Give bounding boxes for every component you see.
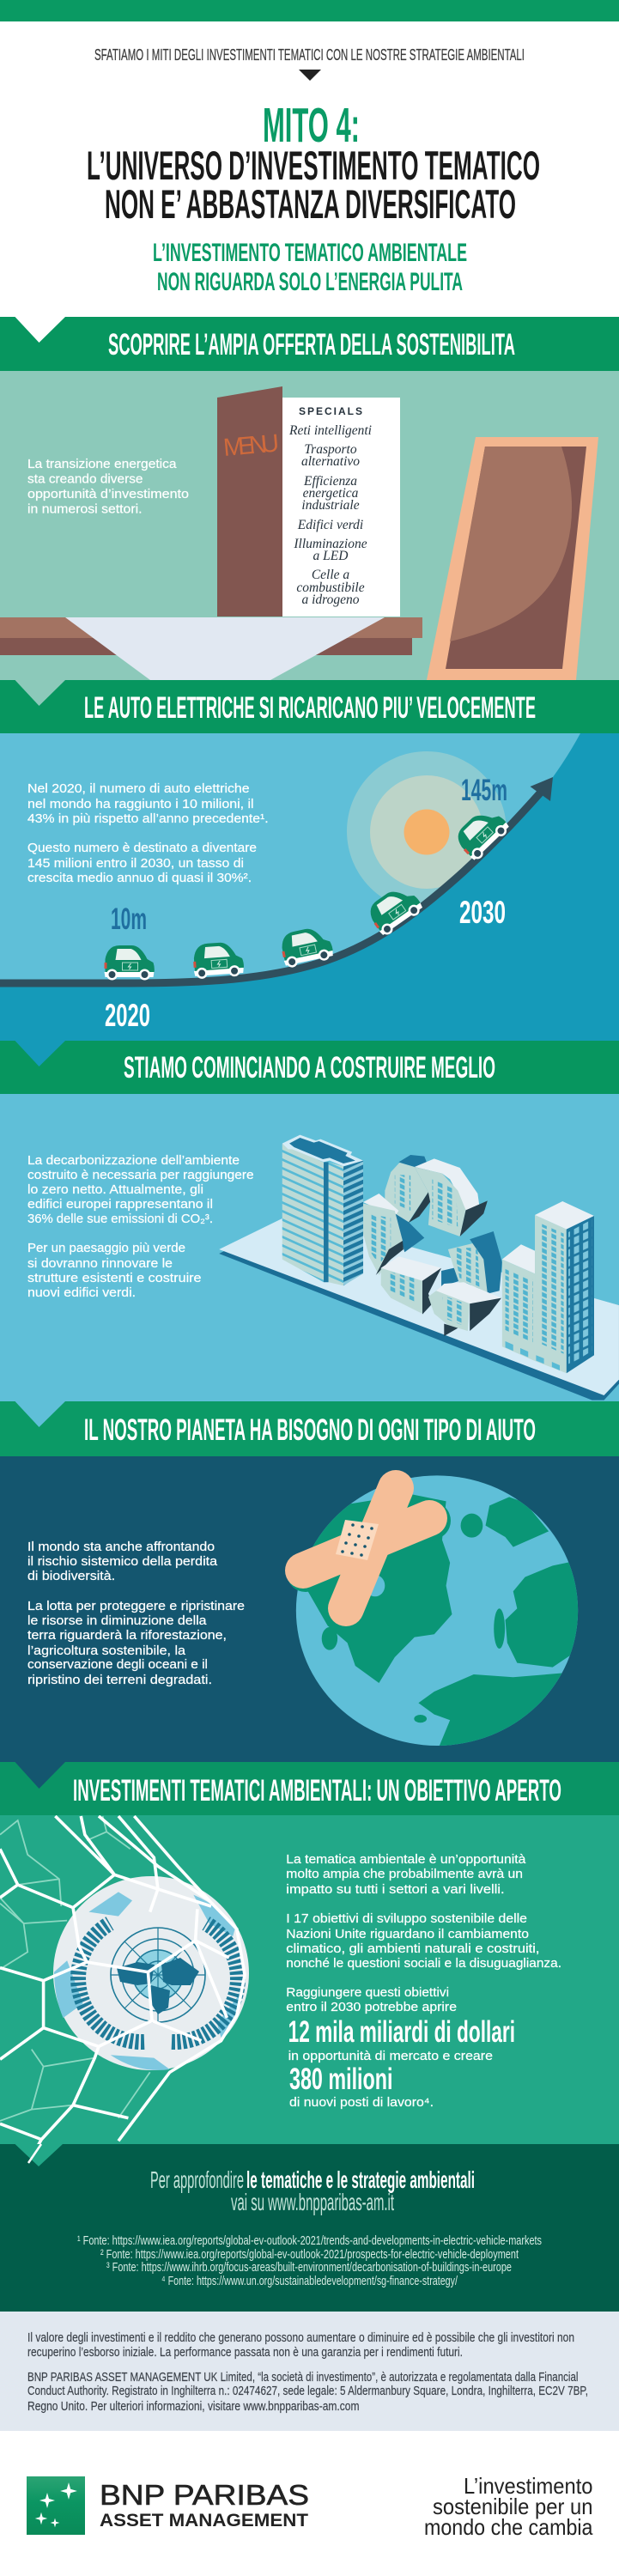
menu list: industriale (301, 498, 360, 513)
body text (27, 1540, 245, 1687)
panel: call to action and sources (0, 2144, 619, 2312)
body text: nuovi edifici verdi. (27, 1286, 136, 1300)
footnote sources: ⁴ Fonte: https://www.un.org/sustainabledevelopment/sg-finance-strategy/ (161, 2274, 458, 2288)
menu list: SPECIALS (299, 405, 364, 417)
body text (27, 782, 269, 885)
panel background (0, 733, 619, 1041)
body text: il rischio sistemico della perdita (27, 1555, 218, 1569)
disclaimer text: recuperino l’esborso iniziale. La performance passata non è una garanzia per i rendimenti futuri. (27, 2346, 463, 2360)
body text: Nazioni Unite riguardano il cambiamento (286, 1928, 529, 1941)
body text: in opportunità di mercato e creare (288, 2050, 493, 2063)
label: 2020: 2020 (105, 998, 150, 1033)
notch (15, 2144, 63, 2166)
UN emblem (78, 1923, 238, 2042)
body text (286, 1853, 561, 2110)
illustration: football with UN emblem (53, 1876, 249, 2070)
body text: di biodiversità. (27, 1570, 115, 1583)
arrow down (299, 70, 321, 81)
body text: nel mondo ha raggiunto i 10 milioni, il (27, 798, 254, 811)
logo mark (27, 2476, 85, 2535)
call to action: vai su www.bnpparibas-am.it (231, 2189, 394, 2215)
body text: Per un paesaggio più verde (27, 1242, 185, 1255)
body text: Il mondo sta anche affrontando (27, 1540, 215, 1554)
menu list: a idrogeno (301, 592, 360, 607)
body text: di nuovi posti di lavoro⁴. (289, 2096, 434, 2110)
illustration: goal net (0, 1816, 245, 2164)
body text: La tematica ambientale è un’opportunità (286, 1853, 526, 1867)
body text: 145 milioni entro il 2030, un tasso di (27, 857, 244, 871)
disclaimer text (27, 2331, 588, 2414)
body text: entro il 2030 potrebbe aprire (286, 2001, 457, 2014)
recycling building C (363, 1194, 424, 1275)
menu list (288, 405, 372, 607)
call to action (150, 2166, 475, 2215)
tagline: sostenibile per un (433, 2494, 592, 2519)
illustration: bandage (303, 1488, 432, 1608)
panel: buildings (0, 1094, 619, 1401)
call to action: Per approfondire (150, 2166, 244, 2193)
header: planet (0, 1401, 619, 1456)
recycling building E (448, 1231, 502, 1295)
menu list: a LED (313, 549, 348, 563)
disclaimer text: Regno Unito. Per ulteriori informazioni, visitare www.bnpparibas-am.com (27, 2400, 359, 2414)
header: sustainability offer (0, 317, 619, 371)
panel background (0, 1815, 619, 2144)
body text: 43% in più rispetto all’anno precedente¹. (27, 812, 269, 826)
ball patches (54, 1892, 246, 2070)
platform (219, 1213, 619, 1400)
body text: nonché le questioni sociali e la disuguaglianza. (286, 1957, 561, 1971)
panel: electric cars (0, 733, 619, 1041)
intro heading block (87, 46, 540, 296)
body text: molto ampia che probabilmente avrà un (286, 1868, 523, 1881)
body text: l’agricoltura sostenibile, la (27, 1644, 186, 1658)
body text: Raggiungere questi obiettivi (286, 1986, 449, 2000)
body text: strutture esistenti e costruire (27, 1272, 202, 1285)
recycling building F (428, 1282, 501, 1336)
panel: sustainability menu (0, 371, 619, 680)
tagline (424, 2473, 593, 2540)
tagline: mondo che cambia (424, 2514, 593, 2540)
wordmark: BNP PARIBAS (100, 2479, 309, 2511)
icons: five cars (105, 803, 512, 981)
panel: disclaimer (0, 2312, 619, 2431)
header: electric cars (0, 680, 619, 733)
header: open goal (0, 1762, 619, 1815)
body text: impatto su tutti i settori a vari livelli. (286, 1883, 505, 1897)
body text: opportunità d’investimento (27, 488, 189, 501)
growth arrow (0, 777, 553, 983)
tagline: L’investimento (464, 2473, 592, 2499)
panel background (0, 1094, 619, 1401)
body text: La decarbonizzazione dell’ambiente (27, 1154, 240, 1168)
footnote sources (77, 2233, 542, 2288)
recycling building A (385, 1155, 434, 1223)
menu list: Trasporto (304, 442, 357, 457)
illustration: city platform with recycling-shaped buildings (219, 1135, 619, 1400)
body text: 36% delle sue emissioni di CO₂³. (27, 1212, 213, 1226)
body text: terra riguarderà la riforestazione, (27, 1629, 227, 1643)
menu list: Efficienza (303, 474, 357, 489)
body text: ripristino dei terreni degradati. (27, 1674, 212, 1687)
body text: edifici europei rappresentano il (27, 1198, 213, 1212)
illustration: menu (217, 386, 400, 617)
body text: Questo numero è destinato a diventare (27, 841, 257, 855)
menu list: Edifici verdi (297, 518, 363, 532)
body text: costruito è necessaria per raggiungere (27, 1169, 254, 1182)
body text: I 17 obiettivi di sviluppo sostenibile delle (286, 1912, 527, 1926)
body text: Nel 2020, il numero di auto elettriche (27, 782, 250, 796)
body text: climatico, gli ambienti naturali e costruiti, (286, 1942, 539, 1956)
body text: crescita medio annuo di quasi il 30%². (27, 872, 252, 885)
menu list: Celle a (312, 568, 349, 582)
body text: lo zero netto. Attualmente, gli (27, 1183, 203, 1197)
recycling building B (415, 1158, 488, 1236)
illustration: table (0, 617, 422, 680)
menu list: Reti intelligenti (288, 423, 372, 438)
menu list: combustibile (296, 580, 365, 595)
menu list: Illuminazione (293, 537, 367, 551)
logo: BNP Paribas Asset Management (27, 2476, 309, 2535)
panel: open goal (0, 1815, 619, 2164)
body text: conservazione degli oceani e il (27, 1658, 208, 1672)
tower 2 (502, 1201, 594, 1373)
header: buildings (0, 1041, 619, 1094)
big number: 380 milioni: 380 milioni (289, 2063, 393, 2096)
body text: le risorse in diminuzione della (27, 1614, 208, 1628)
panel background (0, 1456, 619, 1762)
label: 2030: 2030 (459, 895, 506, 930)
body text: La transizione energetica (27, 458, 177, 471)
recycling building D (381, 1256, 460, 1315)
panel: planet (0, 1456, 619, 1762)
illustration: globe (296, 1475, 580, 1749)
menu list: energetica (303, 486, 359, 501)
body text: si dovranno rinnovare le (27, 1257, 173, 1271)
body text (27, 1154, 254, 1300)
label: 10m: 10m (111, 902, 147, 936)
tower 1 (282, 1135, 363, 1285)
body text: La lotta per proteggere e ripristinare (27, 1600, 245, 1613)
menu cover label: MENU (222, 429, 280, 462)
hill (0, 733, 619, 1041)
illustration: standing frame (427, 437, 598, 680)
logo: BNP Paribas Asset Management: ASSET MANAGEMENT (100, 2511, 308, 2530)
body text: in numerosi settori. (27, 503, 143, 517)
body text: sta creando diverse (27, 472, 143, 486)
body text (27, 458, 189, 517)
title: MITO 4: (263, 98, 360, 153)
menu list: alternativo (301, 454, 360, 469)
panel background (0, 371, 619, 680)
top green bar (0, 0, 619, 21)
illustration: sun (347, 751, 507, 911)
label: 145m: 145m (461, 774, 507, 807)
